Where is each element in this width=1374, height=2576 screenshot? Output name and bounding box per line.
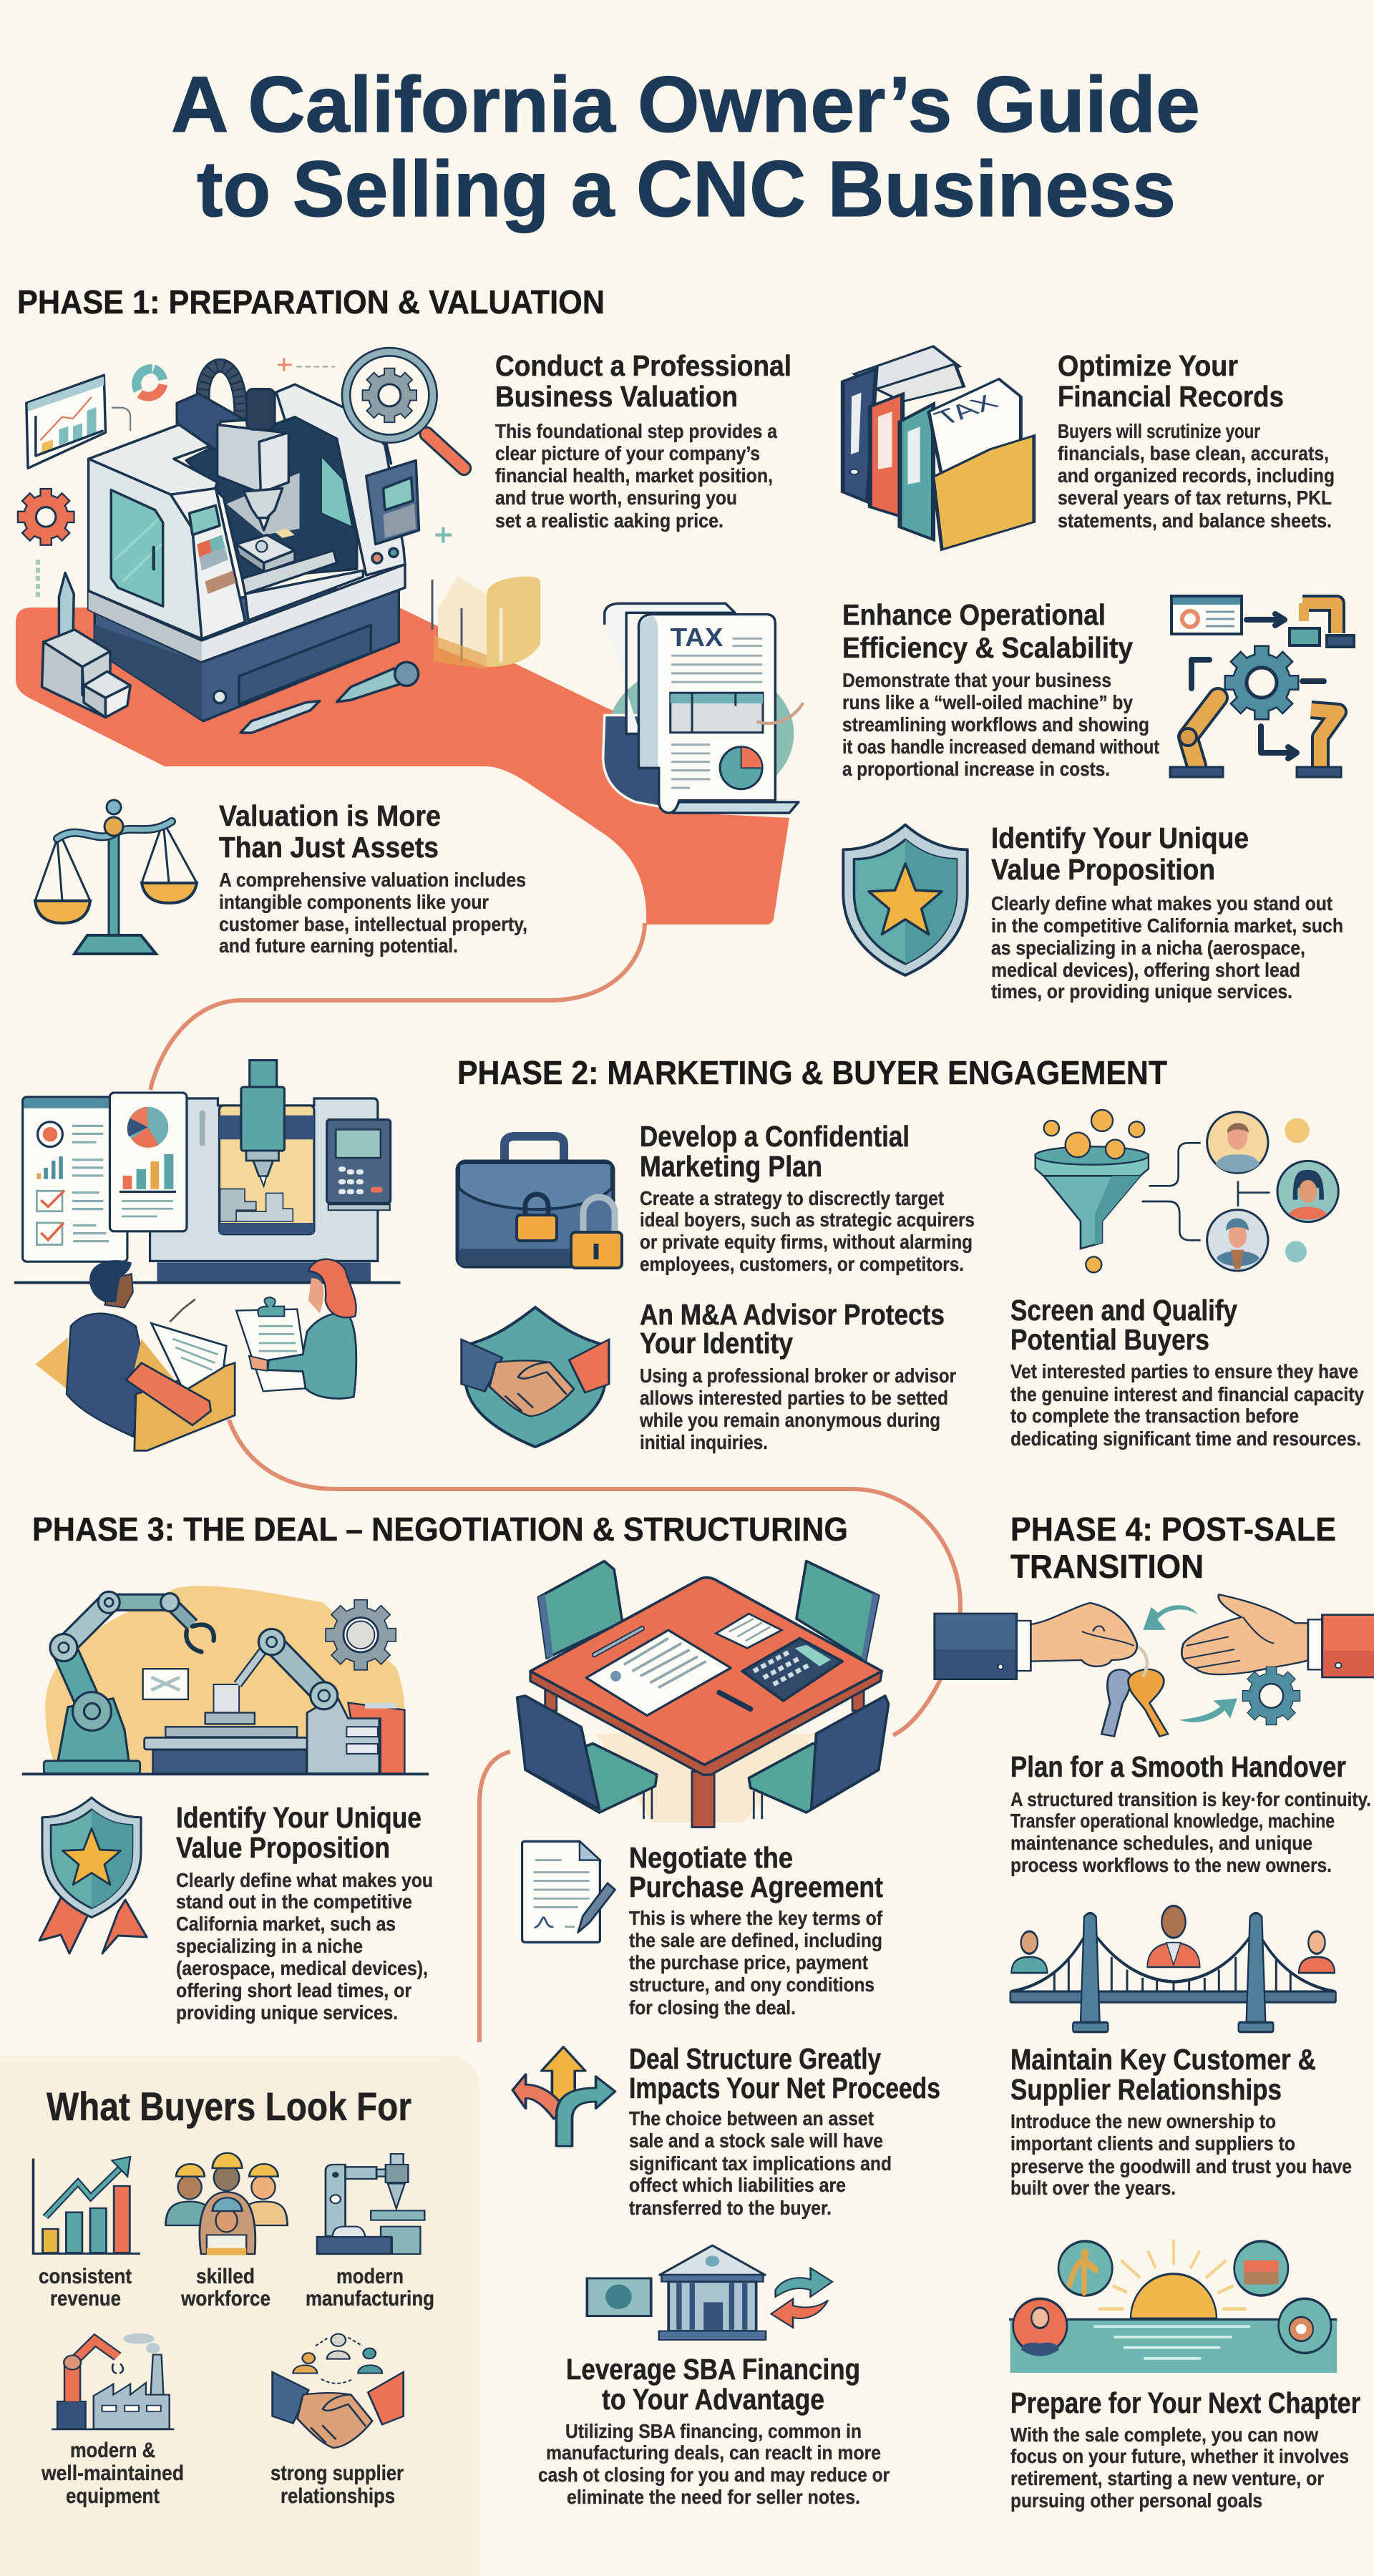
body: clear picture of your company’s (495, 442, 760, 464)
receiving hand (1181, 1594, 1374, 1677)
robot top right (1290, 603, 1354, 647)
icon: shield handshake (462, 1307, 609, 1447)
body: statements, and balance sheets. (1058, 509, 1332, 532)
card: valuation is more than just assets (219, 799, 527, 957)
label: modern and well-maintained equipment: modern & (70, 2439, 155, 2462)
giving hand (1030, 1603, 1137, 1667)
label: skilled workforce: skilled (196, 2265, 255, 2288)
icon: contract document with pen (522, 1841, 615, 1942)
heading: Develop a Confidential (640, 1120, 910, 1153)
icon: skilled workforce (166, 2153, 288, 2255)
body (1010, 1788, 1371, 1876)
heading: Value Proposition (176, 1831, 390, 1864)
teal plus and dash (435, 527, 452, 542)
body: important clients and suppliers to (1010, 2132, 1295, 2155)
body (219, 869, 527, 957)
report panel (23, 1097, 127, 1262)
title: A California Owner’s Guide (171, 61, 1200, 149)
body (991, 892, 1343, 1002)
icon: bridge with people (1010, 1906, 1336, 2032)
body: A comprehensive valuation includes (219, 869, 526, 891)
card: maintain key customer and supplier relationships (1010, 2043, 1352, 2199)
gear (1226, 647, 1297, 718)
label: skilled workforce: workforce (180, 2287, 271, 2311)
right housing (276, 384, 405, 575)
icon: manufacturing machine (317, 2154, 424, 2254)
body: several years of tax returns, PKL (1058, 487, 1332, 509)
body: to complete the transaction before (1010, 1405, 1299, 1427)
body: intangible components like your (219, 891, 489, 913)
illustration: robot arms at machine (22, 1586, 429, 1774)
heading: phase 4: TRANSITION (1010, 1548, 1204, 1585)
icon: revenue chart (33, 2157, 140, 2253)
icon: briefcase with locks (457, 1136, 622, 1268)
body: Clearly define what makes you stand out (991, 892, 1332, 914)
heading: Valuation is More (219, 799, 441, 832)
body: medical devices), offering short lead (991, 959, 1300, 981)
body: Buyers will scrutinize your (1058, 420, 1260, 442)
suspenders (1054, 1957, 1290, 1991)
spindle head (218, 389, 288, 530)
sun and rays (1098, 2240, 1247, 2318)
icon: sunset next chapter (1009, 2240, 1337, 2373)
heading (640, 1298, 945, 1360)
path: connector from phase 2 to phase 4 (229, 1420, 960, 1735)
body (176, 1869, 433, 2024)
label: consistent revenue: consistent (39, 2265, 132, 2288)
heading: Supplier Relationships (1010, 2073, 1282, 2106)
cables (1011, 1928, 1335, 1991)
body: customer base, intellectual property, (219, 913, 527, 935)
title (171, 61, 1200, 233)
body: built over the years. (1010, 2177, 1176, 2199)
gantry bracket (177, 394, 245, 451)
card: plan for a smooth handover (1010, 1750, 1371, 1876)
label: modern manufacturing: modern (336, 2265, 404, 2288)
machine ledge (89, 565, 405, 662)
body (629, 2107, 892, 2219)
amber backdrop (45, 1586, 404, 1772)
icon: funnel with buyers (1035, 1110, 1338, 1272)
label: TAX on folder: TAX (928, 391, 1004, 429)
icon: ribbon shield (39, 1797, 147, 1953)
heading (629, 2042, 940, 2104)
main housing window (111, 490, 163, 606)
body: retirement, starting a new venture, or (1010, 2467, 1324, 2489)
heading (640, 1120, 910, 1183)
icon: hands passing keys (935, 1594, 1374, 1737)
heading: phase 4: PHASE 4: POST-SALE (1010, 1511, 1336, 1548)
path: connector down into phase 3 (479, 1752, 510, 2042)
label: modern and well-maintained equipment: equipment (66, 2484, 160, 2508)
body: manufacturing deals, can reacIt in more (546, 2441, 881, 2464)
heading (629, 1841, 883, 1903)
body (1058, 420, 1335, 532)
water (1009, 2319, 1337, 2373)
heading: What Buyers Look For (47, 2084, 411, 2129)
floor line (22, 1770, 429, 1777)
circle contents (1021, 2249, 1313, 2356)
body: sale and a stock sale will have (629, 2129, 883, 2152)
card: enhance operational efficiency and scalability (842, 598, 1159, 780)
heading (176, 1801, 422, 1864)
heading: Optimize Your (1058, 349, 1238, 382)
body: transferred to the buyer. (629, 2197, 832, 2219)
card: prepare for your next chapter (1010, 2386, 1360, 2512)
main housing left face (89, 459, 202, 639)
illustration: tax document (603, 603, 803, 813)
chart card (109, 1093, 187, 1258)
heading: to Your Advantage (602, 2383, 824, 2416)
label: skilled workforce (180, 2265, 271, 2311)
papers and calculator (586, 1614, 842, 1716)
woman with clipboard (236, 1259, 356, 1398)
label: strong supplier relationships (271, 2462, 404, 2508)
heading: Financial Records (1058, 380, 1284, 413)
right robot (238, 1629, 404, 1774)
heading: Screen and Qualify (1010, 1294, 1237, 1327)
body (495, 420, 777, 532)
heading (495, 349, 791, 413)
body: significant tax implications and (629, 2152, 892, 2175)
label: consistent revenue (39, 2265, 132, 2311)
heading: phase 2: PHASE 2: MARKETING & BUYER ENGAGEMENT (457, 1054, 1167, 1091)
heading: Negotiate the (629, 1841, 793, 1874)
card: negotiate the purchase agreement (629, 1841, 883, 2019)
label: consistent revenue: revenue (50, 2287, 121, 2311)
gear (326, 1601, 395, 1669)
arrows (1247, 614, 1285, 625)
body: set a realistic aaking price. (495, 509, 723, 532)
heading: Identify Your Unique (176, 1801, 422, 1834)
label: strong supplier relationships: strong supplier (271, 2462, 404, 2485)
buyer avatars (1207, 1112, 1338, 1271)
body: streamlining workflows and showing (842, 713, 1149, 736)
donut chart (137, 369, 163, 396)
heading: Efficiency & Scalability (842, 631, 1133, 664)
path: connector from phase 1 to phase 2 (150, 923, 645, 1090)
body: stand out in the competitive (176, 1890, 412, 1913)
card: identify your unique value proposition, phase 3 (176, 1801, 433, 2024)
connectors (1143, 1143, 1269, 1240)
heading (842, 598, 1133, 664)
body (1010, 1360, 1364, 1450)
label: strong supplier relationships: relationships (281, 2484, 395, 2508)
body (629, 1907, 883, 2019)
card: develop a confidential marketing plan (640, 1120, 975, 1275)
body (639, 1365, 956, 1453)
heading: Maintain Key Customer & (1010, 2043, 1316, 2076)
coins (1044, 1110, 1144, 1272)
heading: phase 3: PHASE 3: THE DEAL – NEGOTIATION & STRUCTURING (32, 1511, 848, 1548)
heading (566, 2353, 860, 2416)
left sleeve (935, 1614, 1030, 1679)
body: Utilizing SBA financing, common in (565, 2420, 862, 2442)
icon: star shield (843, 825, 968, 975)
chart card (26, 375, 105, 468)
icon: cash bank and swap arrows (587, 2245, 832, 2340)
floor line (14, 1279, 400, 1286)
card: optimize your financial records (1058, 349, 1335, 532)
body: (aerospace, medical devices), (176, 1957, 428, 1979)
body (538, 2420, 890, 2508)
label: modern manufacturing (306, 2265, 434, 2311)
body (842, 669, 1159, 780)
heading: Purchase Agreement (629, 1870, 883, 1903)
heading (1058, 349, 1284, 413)
body: as specializing in a nicha (aerospace, (991, 937, 1305, 959)
bracket and plus decor (112, 408, 130, 431)
tool block (42, 572, 130, 718)
body: This foundational step provides a (495, 420, 777, 442)
body: process workflows to the new owners. (1010, 1854, 1332, 1876)
icon: binders and tax folder (843, 346, 1034, 550)
label: modern and well-maintained equipment (41, 2439, 184, 2508)
heading: Business Valuation (495, 380, 738, 413)
heading: An M&A Advisor Protects (640, 1298, 945, 1331)
back chairs (539, 1561, 879, 1662)
machine base (94, 585, 399, 721)
deck (1010, 1991, 1336, 2002)
main housing control strip (171, 489, 245, 639)
card: deal structure greatly impacts your net proceeds (629, 2042, 940, 2219)
control panel (366, 444, 419, 563)
panel: what buyers look for (0, 2056, 480, 2576)
body (1010, 2110, 1352, 2199)
body: runs like a “well-oiled machine” by (842, 691, 1133, 713)
magnifier with gear (346, 352, 464, 468)
heading: Identify Your Unique (991, 821, 1249, 854)
keys (1101, 1644, 1168, 1737)
body: the sale are defined, including (629, 1929, 882, 1951)
left robot (44, 1591, 214, 1774)
body: With the sale complete, you can now (1010, 2424, 1318, 2446)
body: Using a professional broker or advisor (640, 1365, 956, 1387)
heading: Conduct a Professional (495, 349, 791, 382)
body: maintenance schedules, and unique (1010, 1832, 1312, 1854)
main housing top (89, 423, 218, 494)
card: leverage SBA financing (538, 2353, 890, 2508)
body: times, or providing unique services. (991, 980, 1292, 1002)
body: initial inquiries. (640, 1431, 768, 1453)
heading: Leverage SBA Financing (566, 2353, 860, 2386)
path: coral floor ribbon (16, 608, 789, 924)
body: allows interested parties to be setted (640, 1387, 948, 1409)
body: Demonstrate that your business (842, 669, 1111, 691)
body: ideal boyers, such as strategic acquirers (640, 1209, 975, 1231)
cable carrier (203, 366, 240, 420)
body (1010, 2424, 1349, 2512)
body: This is where the key terms of (629, 1907, 883, 1929)
icon: balance scale (35, 800, 197, 954)
body: and organized records, including (1058, 464, 1335, 487)
tools on the floor (240, 662, 419, 733)
body: and future earning potential. (219, 935, 458, 957)
body: Introduce the new ownership to (1010, 2110, 1276, 2132)
body: financial health, market position, (495, 464, 773, 487)
body: the purchase price, payment (629, 1951, 868, 1974)
heading: Enhance Operational (842, 598, 1106, 631)
heading (991, 821, 1249, 886)
label: modern and well-maintained equipment: well-maintained (41, 2462, 184, 2485)
heading (1010, 1294, 1237, 1356)
machine table (143, 1669, 316, 1774)
body: financials, base clean, accurats, (1058, 442, 1329, 464)
circles: retirement venture personal goals (1013, 2241, 1331, 2353)
heading: Impacts Your Net Proceeds (629, 2072, 940, 2104)
illustration: CNC machine (19, 352, 464, 733)
heading: Your Identity (640, 1327, 793, 1360)
towers (1073, 1913, 1273, 2032)
icon: table with documents and chairs (517, 1561, 889, 1942)
body: for closing the deal. (629, 1996, 796, 2019)
heading: Marketing Plan (640, 1150, 822, 1183)
robot lower left (1170, 698, 1223, 777)
body: offect which liabilities are (629, 2174, 846, 2196)
icon: coral gear (19, 489, 73, 545)
card: identify your unique value proposition (991, 821, 1343, 1002)
heading: Than Just Assets (219, 831, 439, 864)
body: and true worth, ensuring you (495, 487, 737, 509)
dashboard (1171, 596, 1242, 634)
icon: branching arrows (512, 2047, 615, 2146)
card: screen and qualify potential buyers (1010, 1294, 1364, 1450)
body: structure, and ony conditions (629, 1974, 874, 1996)
body: employees, customers, or competitors. (640, 1253, 964, 1275)
table (530, 1578, 882, 1828)
heading: Deal Structure Greatly (629, 2042, 881, 2075)
heading: phase 4 (1010, 1511, 1336, 1585)
man with document (35, 1260, 235, 1450)
body: it oas handle increased demand without (842, 736, 1159, 758)
heading: phase 1: PHASE 1: PREPARATION & VALUATION (17, 283, 605, 321)
icon: factory with robot arm (52, 2333, 174, 2429)
icons in panel (33, 2153, 424, 2448)
body: Clearly define what makes you (176, 1869, 433, 1891)
cavity (186, 417, 363, 620)
machine (150, 1060, 391, 1282)
body: Create a strategy to discrectly target (640, 1187, 944, 1209)
front chairs (517, 1696, 889, 1819)
illustration: advisors reviewing machine (14, 1060, 400, 1450)
label: TAX: TAX (671, 623, 723, 652)
icon: supplier relationship handshake (273, 2334, 404, 2448)
body (640, 1187, 975, 1275)
body: eliminate the need for seller notes. (567, 2486, 860, 2508)
card: an M&A advisor protects your identity (639, 1298, 956, 1453)
body: specializing in a niche (176, 1935, 363, 1957)
body: providing unique services. (176, 2001, 398, 2024)
arrows and gear (1143, 1605, 1300, 1724)
funnel (1035, 1146, 1149, 1249)
heading: Potential Buyers (1010, 1323, 1209, 1356)
body: The choice between an asset (629, 2107, 874, 2129)
body: pursuing other personal goals (1010, 2489, 1262, 2512)
heading (1010, 2043, 1316, 2106)
body: offering short lead times, or (176, 1979, 411, 2001)
heading: Value Proposition (991, 853, 1215, 886)
body: a proportional increase in costs. (842, 758, 1110, 780)
card: conduct a professional business valuation (495, 349, 791, 532)
body: while you remain anonymous during (639, 1409, 940, 1431)
illustration: gold blocks (432, 576, 540, 669)
heading (219, 799, 441, 864)
people (1011, 1906, 1335, 1973)
title: to Selling a CNC Business (197, 145, 1176, 233)
body: California market, such as (176, 1913, 396, 1935)
body: or private equity firms, without alarming (640, 1231, 973, 1253)
body: cash ot closing for you and may reduce or (538, 2464, 890, 2486)
label: modern manufacturing: manufacturing (306, 2287, 434, 2311)
icon: workflow with robots and gear (1170, 596, 1354, 777)
robot lower right (1297, 710, 1341, 777)
